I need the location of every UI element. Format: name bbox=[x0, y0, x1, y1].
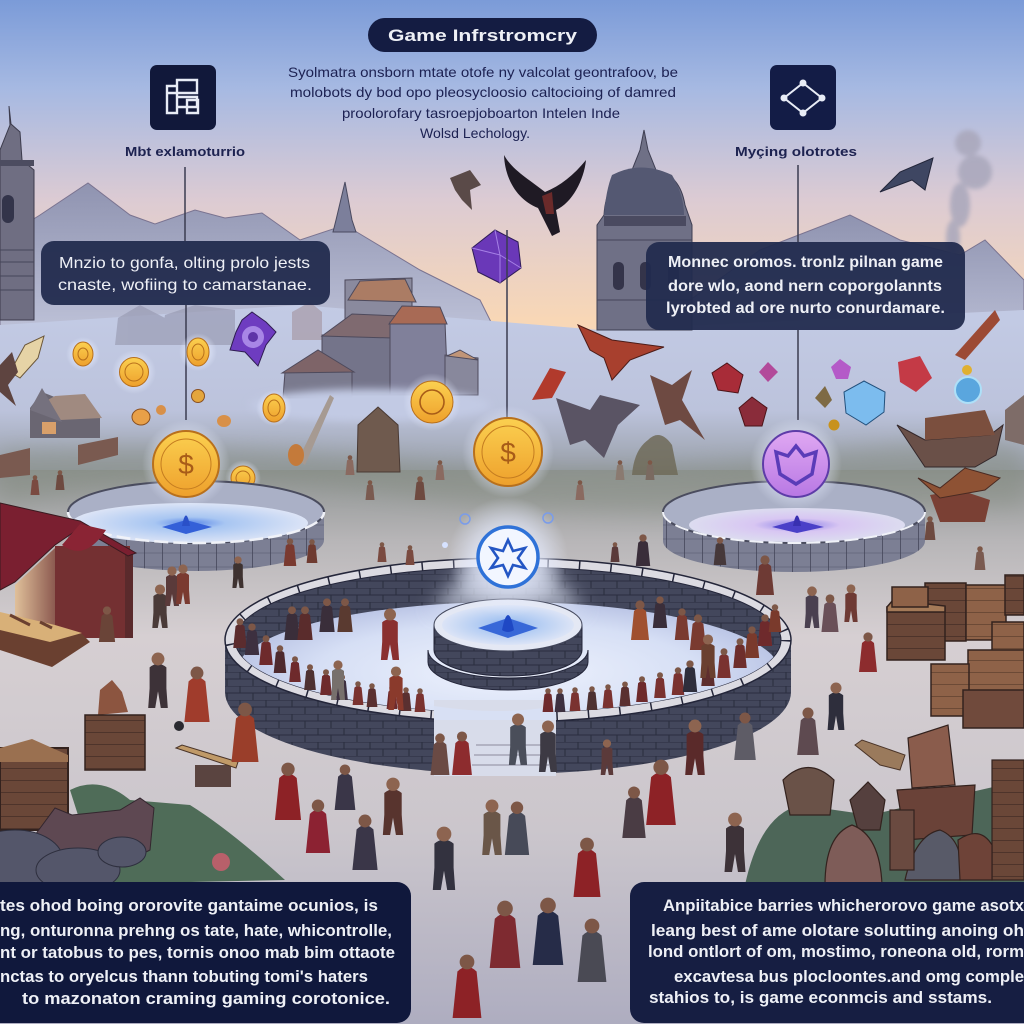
village buildings bbox=[282, 278, 478, 398]
callout: bottom left: to mazonaton craming gaming corotonice. bbox=[22, 989, 390, 1008]
left vertical connector bbox=[185, 167, 186, 420]
village mist bbox=[250, 389, 490, 421]
broken cart plank bbox=[855, 740, 905, 770]
left icon label: Mbt exlamoturrio bbox=[125, 144, 245, 159]
right barrels and sacks bbox=[783, 725, 1024, 885]
cathedral tower bbox=[597, 130, 692, 330]
crates right bbox=[887, 575, 1024, 728]
callout: top left: cnaste, wofiing to camarstanae. bbox=[58, 277, 312, 294]
callout: bottom right: lond ontlort of om, mostimo, roneona old, rorm bbox=[648, 942, 1024, 961]
left winged creature bbox=[0, 336, 44, 406]
large coin center bbox=[462, 406, 554, 498]
mountains bbox=[0, 183, 1024, 360]
purple crystal bbox=[472, 230, 521, 283]
callout: bottom left: tes ohod boing ororovite gantaime ocunios, is bbox=[0, 896, 378, 915]
far right fortress bbox=[1005, 395, 1024, 445]
left rocks bbox=[0, 830, 146, 892]
central ring wall bbox=[225, 558, 791, 776]
central medallion bbox=[442, 497, 568, 617]
callout: top right: lyrobted ad ore nurto conurdamare. bbox=[666, 300, 945, 317]
callout: bottom left: nt or tatobus to pes, tornis onoo mab bim ottaote bbox=[0, 943, 395, 962]
right hut bbox=[918, 468, 1000, 522]
left pool bbox=[68, 481, 324, 571]
medallion light beam bbox=[430, 545, 585, 610]
callout: top right: Monnec oromos. tronlz pilnan game bbox=[668, 254, 943, 271]
flying dragons and gems bbox=[288, 310, 1000, 475]
callout: bottom right bbox=[630, 882, 1024, 1023]
stone hut bbox=[357, 407, 400, 472]
background: misty midground bbox=[0, 305, 1024, 480]
right vertical connector bbox=[797, 165, 799, 420]
callout: top right bbox=[646, 242, 965, 330]
black bird bbox=[504, 155, 586, 236]
red market tent bbox=[0, 503, 136, 667]
large coin center: $ bbox=[500, 437, 516, 468]
callout: top left bbox=[41, 241, 330, 305]
lying figure bbox=[35, 798, 154, 860]
bottom left crate bbox=[0, 739, 68, 830]
callout: bottom right: Anpiitabice barries whicherorovo game asotx bbox=[663, 896, 1024, 915]
bench bbox=[176, 745, 238, 787]
icon: right network bbox=[770, 65, 836, 130]
large coin left bbox=[142, 420, 230, 508]
crowd behind the wall bbox=[30, 455, 985, 672]
callout: top right: dore wlo, aond nern coporgolannts bbox=[668, 278, 942, 295]
smoke bbox=[946, 130, 992, 256]
callout: bottom left: nctas to oryelcus thann tobuting tomi's haters bbox=[0, 967, 368, 986]
right pool bbox=[663, 481, 925, 572]
small gargoyle bbox=[450, 170, 481, 210]
distant fences bbox=[0, 437, 118, 478]
background: sky bbox=[0, 0, 1024, 400]
left tower bbox=[0, 106, 34, 320]
purple rune bbox=[230, 312, 276, 366]
large coin left: $ bbox=[178, 449, 194, 480]
right ship bbox=[897, 410, 1003, 467]
intro text: Wolsd Lechology. bbox=[420, 125, 530, 141]
ball bbox=[174, 721, 184, 731]
title pill: Game Infrstromcry bbox=[388, 26, 578, 45]
callout: bottom left bbox=[0, 882, 411, 1023]
callout: bottom right: stahios to, is game econmcis and sstams. bbox=[649, 988, 992, 1007]
intro text bbox=[288, 64, 678, 141]
grass haze band bbox=[0, 441, 1024, 513]
left barn bbox=[30, 388, 102, 438]
crowd on ring wall bbox=[233, 596, 781, 775]
spire bbox=[333, 182, 356, 232]
right greenery bbox=[745, 780, 1024, 885]
kite creature bbox=[880, 158, 933, 192]
foreground people bbox=[99, 606, 844, 1018]
callout: bottom right: leang best of ame olotare solutting anoing oh bbox=[651, 921, 1024, 940]
central fountain bbox=[428, 599, 588, 690]
right icon label: Myçing olotrotes bbox=[735, 144, 857, 159]
flower bush bbox=[212, 853, 230, 871]
callout: bottom left: ng, onturonna prehng os tate, hate, whicontrolle, bbox=[0, 921, 392, 940]
intro text: proolorofary tasroepjoboarton Intelen Inde bbox=[342, 105, 620, 121]
intro text: Syolmatra onsborn mtate otofe ny valcolat geontrafoov, be bbox=[288, 64, 678, 80]
intro text: molobots dy bod opo pleosycloosio caltocioing of damred bbox=[290, 84, 676, 100]
callout: bottom right: excavtesa bus plocloontes.and omg comple bbox=[674, 967, 1024, 986]
faded background houses bbox=[115, 302, 322, 345]
center vertical line bbox=[506, 230, 508, 420]
title pill bbox=[368, 18, 597, 52]
small floating coins bbox=[66, 333, 461, 496]
background: ground bbox=[0, 470, 1024, 1024]
left crate with debris bbox=[85, 680, 145, 770]
callout: top left: Mnzio to gonfa, olting prolo jests bbox=[59, 255, 310, 272]
icon: left building blocks bbox=[150, 65, 216, 130]
left greenery bbox=[70, 784, 285, 884]
large coin purple bbox=[750, 418, 842, 510]
